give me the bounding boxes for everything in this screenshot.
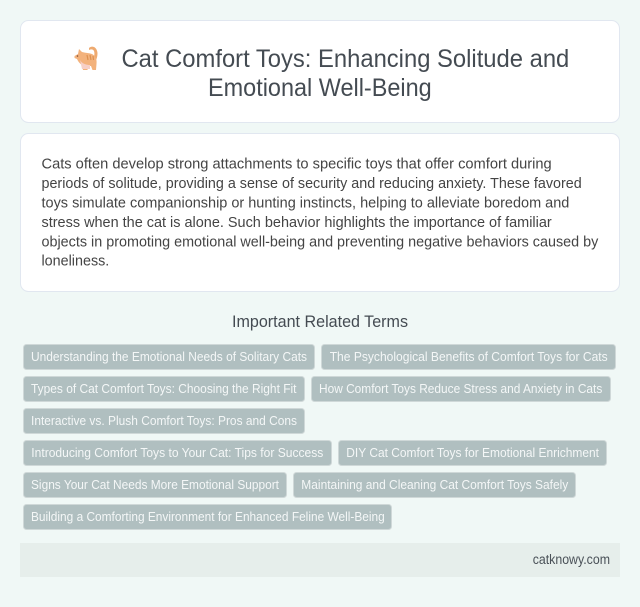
text block: description: Cats often develop strong attachments to specific toys that offer comfort during bbox=[42, 156, 552, 172]
tag: Interactive vs. Plush Comfort Toys: Pros and Cons bbox=[31, 413, 297, 428]
tag: The Psychological Benefits of Comfort Toys for Cats bbox=[330, 349, 608, 364]
panel: description bbox=[20, 134, 620, 292]
tag: Maintaining and Cleaning Cat Comfort Toys Safely bbox=[301, 477, 569, 492]
tag: Types of Cat Comfort Toys: Choosing the Right Fit bbox=[31, 381, 297, 396]
tag: DIY Cat Comfort Toys for Emotional Enrichment bbox=[346, 445, 599, 460]
tag bbox=[312, 376, 610, 402]
tag: Building a Comforting Environment for Enhanced Feline Well-Being bbox=[31, 509, 385, 524]
tag: Understanding the Emotional Needs of Solitary Cats bbox=[31, 349, 307, 364]
text block: description: stress when the cat is alone. Such behavior highlights the importance of familiar bbox=[42, 215, 552, 231]
text block: description: periods of solitude, providing a sense of security and reducing anxiety. These favored bbox=[42, 176, 582, 192]
tag bbox=[24, 440, 332, 466]
footer bbox=[20, 543, 620, 577]
heading: related terms: Important Related Terms bbox=[232, 312, 408, 331]
tag bbox=[294, 472, 576, 498]
text block: description bbox=[42, 156, 599, 270]
tag: How Comfort Toys Reduce Stress and Anxiety in Cats bbox=[319, 381, 602, 396]
icon: cat bbox=[74, 47, 98, 70]
tag bbox=[24, 376, 304, 402]
title: Cat Comfort Toys: Enhancing Solitude and bbox=[122, 45, 569, 73]
tag bbox=[338, 440, 606, 466]
text block: description: toys simulate companionship or hunting instincts, helping to alleviate boredom and bbox=[42, 195, 569, 211]
tag bbox=[24, 472, 286, 498]
text block: description: objects in promoting emotional well-being and preventing negative behaviors caused by bbox=[42, 234, 599, 250]
tag bbox=[24, 344, 314, 370]
header panel bbox=[20, 20, 620, 122]
tag list bbox=[24, 344, 616, 530]
tag: Introducing Comfort Toys to Your Cat: Tips for Success bbox=[31, 445, 323, 460]
title bbox=[122, 45, 569, 102]
tag bbox=[24, 408, 304, 434]
text block: description: loneliness. bbox=[42, 254, 109, 270]
tag bbox=[322, 344, 616, 370]
tag: Signs Your Cat Needs More Emotional Support bbox=[31, 477, 279, 492]
footer: catknowy.com bbox=[533, 552, 610, 567]
tag bbox=[24, 504, 392, 530]
title: Emotional Well-Being bbox=[208, 74, 432, 102]
